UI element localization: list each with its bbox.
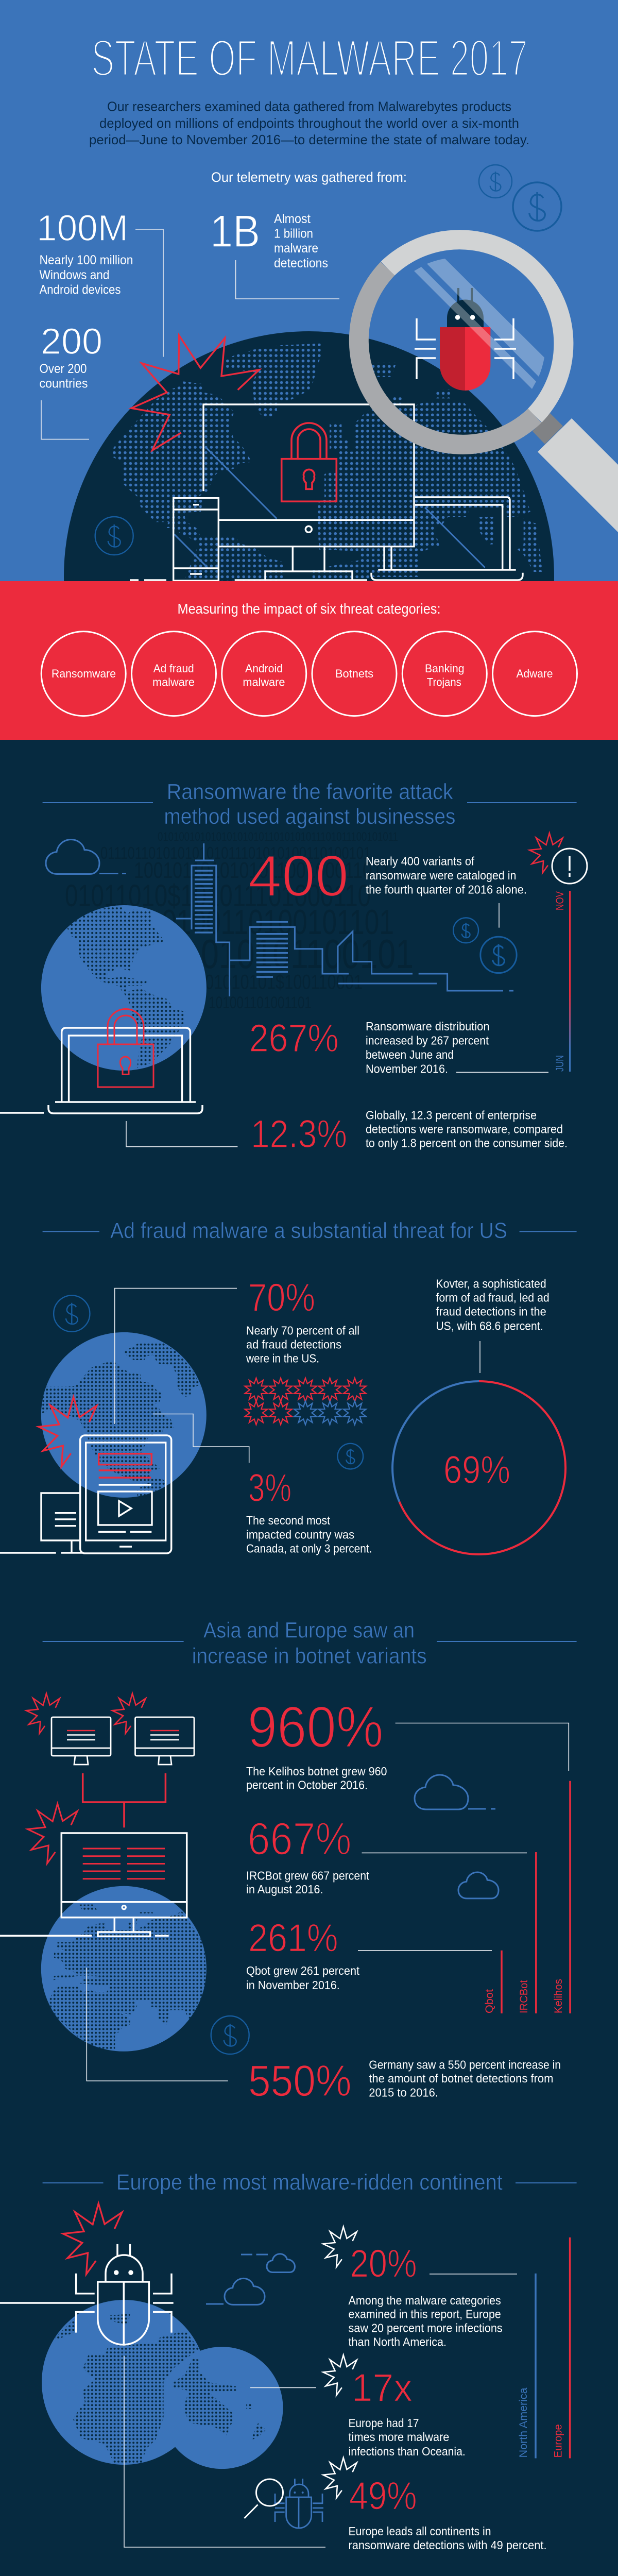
callout lines xyxy=(87,1723,569,2081)
text: Kovter description xyxy=(436,1277,550,1333)
category: adware: Adware xyxy=(516,667,553,680)
text: 667% description: in August 2016. xyxy=(246,1883,323,1896)
icon: phone xyxy=(174,498,218,581)
stat: 200 countries xyxy=(39,321,102,391)
text: 3% description xyxy=(246,1514,372,1555)
intro paragraph: Our researchers examined data gathered from Malwarebytes products xyxy=(107,99,511,114)
bar chart: botnet growth: Kelihos xyxy=(553,1979,564,2013)
icon: desktop monitor xyxy=(0,1493,82,1553)
icon: red burst xyxy=(131,335,259,450)
icon: dollar coin xyxy=(211,2016,249,2054)
globe: americas xyxy=(41,902,211,1077)
text: 667% description: IRCBot grew 667 percent xyxy=(246,1869,370,1883)
panel: threat categories xyxy=(0,581,618,740)
intro paragraph xyxy=(89,99,529,147)
stat: 20%: 20% xyxy=(350,2242,417,2286)
binary code background: 0101001010101010101011010101011101011100101011 xyxy=(158,830,398,844)
icon: magnifying glass xyxy=(359,240,618,532)
text: 12.3% description: detections were ransomware, compared xyxy=(366,1123,563,1136)
category: ad fraud malware: Ad fraud xyxy=(153,662,194,675)
heading: botnets: Asia and Europe saw an xyxy=(203,1618,415,1643)
timeline: June to November: NOV xyxy=(554,891,566,910)
stat: 1B detections xyxy=(210,206,328,270)
text: 20% description: examined in this report, Europe xyxy=(348,2307,501,2320)
magnifier glare xyxy=(414,259,544,389)
globes: dotted maps xyxy=(41,2298,286,2473)
icon: command monitor xyxy=(0,1804,187,1936)
panel: hero header xyxy=(0,0,618,581)
text: 20% description: Among the malware categories xyxy=(348,2294,501,2307)
text: 960% description: percent in October 2016. xyxy=(246,1778,368,1792)
icon: desktop monitor xyxy=(130,404,414,580)
icon: coin on globe xyxy=(95,517,133,555)
telemetry subheading: Our telemetry was gathered from: xyxy=(211,170,407,185)
binary code background: 01011010$101011101000110 xyxy=(65,878,371,913)
icon: tablet with ad xyxy=(80,1435,171,1553)
text: 70% description: were in the US. xyxy=(246,1352,319,1365)
text: 12.3% description xyxy=(366,1109,568,1150)
stat: 70%: 70% xyxy=(248,1276,315,1320)
heading: Europe: Europe the most malware-ridden continent xyxy=(116,2170,503,2195)
text: 261% description: Qbot grew 261 percent xyxy=(246,1964,360,1977)
callout lines xyxy=(124,2274,517,2547)
heading: ransomware: Ransomware the favorite attack xyxy=(167,779,453,804)
category: ransomware xyxy=(41,632,126,716)
icon: cityscape xyxy=(176,843,513,996)
category: adware xyxy=(492,632,577,716)
category: android malware: Android xyxy=(245,662,283,675)
icon: dollar coins top xyxy=(479,165,561,231)
stat: 200 countries: countries xyxy=(39,377,88,391)
text: 400 description: ransomware were cataloged in xyxy=(366,869,516,882)
text: 667% description xyxy=(246,1869,370,1896)
text: Kovter description: fraud detections in the xyxy=(436,1305,546,1318)
heading: ransomware: method used against businesses xyxy=(164,804,455,829)
text: Kovter description: Kovter, a sophisticated xyxy=(436,1277,546,1291)
stat: 100M devices: Nearly 100 million xyxy=(39,253,133,267)
binary code background: 100101101010101100100011011 xyxy=(134,858,390,883)
stat: 267%: 267% xyxy=(249,1016,339,1060)
text: Kovter description: US, with 68.6 percent. xyxy=(436,1319,543,1333)
text: 261% description: in November 2016. xyxy=(246,1978,340,1992)
icon: red bug xyxy=(415,288,516,391)
icon: infected monitors xyxy=(26,1693,194,1827)
intro paragraph: period—June to November 2016—to determine the state of malware today. xyxy=(89,132,529,147)
bar chart: botnet growth: IRCBot xyxy=(518,1980,530,2013)
stat: 100M devices: 100M xyxy=(37,208,128,249)
icon: dollar coins xyxy=(54,1295,363,1469)
category: ad fraud malware: malware xyxy=(152,676,195,689)
donut chart: 69%: 69% xyxy=(443,1448,510,1492)
text: 267% description xyxy=(366,1020,489,1075)
panel: botnet section xyxy=(0,1618,577,2106)
text: 12.3% description: to only 1.8 percent on the consumer side. xyxy=(366,1137,568,1150)
binary code background: 0100110100101101 xyxy=(162,903,394,942)
binary code background xyxy=(65,830,414,1012)
text: Kovter description: form of ad fraud, led ad xyxy=(436,1291,550,1304)
text: 20% description: saw 20 percent more infections xyxy=(348,2321,503,2335)
globe: dotted map xyxy=(41,1329,211,1504)
timeline: June to November xyxy=(554,891,571,1072)
globe: dotted map xyxy=(41,1886,211,2061)
icon: red burst xyxy=(63,2204,122,2274)
text: 550% description xyxy=(369,2058,561,2099)
text: 550% description: Germany saw a 550 percent increase in xyxy=(369,2058,561,2071)
text: 550% description: the amount of botnet detections from xyxy=(369,2072,553,2085)
text: 70% description: Nearly 70 percent of all xyxy=(246,1324,359,1337)
text: 20% description: than North America. xyxy=(348,2335,447,2349)
timeline: June to November: JUN xyxy=(554,1055,566,1072)
icon: red padlock xyxy=(282,423,336,501)
text: 49% description: Europe leads all continents in xyxy=(348,2524,491,2538)
bar chart: botnet growth: Qbot xyxy=(484,1989,495,2013)
icon: white outlined bug xyxy=(0,2244,174,2345)
stat: 200 countries: 200 xyxy=(41,321,102,362)
icon: cloud xyxy=(46,840,126,874)
text: 267% description: increased by 267 percent xyxy=(366,1033,489,1047)
category: botnets xyxy=(312,632,397,716)
heading: ad fraud: Ad fraud malware a substantial threat for US xyxy=(110,1218,507,1243)
icon: laptop xyxy=(371,497,523,580)
panel: Europe section xyxy=(0,2170,577,2552)
categories heading: Measuring the impact of six threat categories: xyxy=(177,601,441,617)
text: 267% description: Ransomware distribution xyxy=(366,1020,489,1033)
text: 49% description: ransomware detections with 49 percent. xyxy=(348,2538,547,2552)
text: 960% description: The Kelihos botnet grew 960 xyxy=(246,1765,387,1778)
category: android malware: malware xyxy=(243,676,285,689)
text: 17x description: Europe had 17 xyxy=(348,2416,419,2430)
stat: 1B detections: Almost xyxy=(274,212,311,226)
stat: 1B detections: 1 billion xyxy=(274,226,313,241)
text: 261% description xyxy=(246,1964,360,1992)
icon: clouds xyxy=(206,2254,295,2304)
text: 3% description: impacted country was xyxy=(246,1528,354,1541)
text: 49% description xyxy=(348,2524,547,2552)
text: 960% description xyxy=(246,1765,387,1792)
heading: botnets: increase in botnet variants xyxy=(192,1643,427,1668)
text: 12.3% description: Globally, 12.3 percent of enterprise xyxy=(366,1109,537,1122)
binary code background: 01010101$100110001 xyxy=(205,971,363,993)
stat: 1B detections: 1B xyxy=(210,206,260,257)
text: 17x description xyxy=(348,2416,466,2458)
text: 3% description: Canada, at only 3 percent. xyxy=(246,1541,372,1555)
text: 400 description: the fourth quarter of 2016 alone. xyxy=(366,883,527,896)
stat: 200 countries: Over 200 xyxy=(39,362,87,376)
stat: 1B detections: malware xyxy=(274,241,318,256)
stat: 1B detections: detections xyxy=(274,256,328,270)
icon: red burst xyxy=(39,1397,97,1467)
icon: laptop with padlock xyxy=(0,1009,202,1113)
text: 3% description: The second most xyxy=(246,1514,331,1527)
text: 400 description xyxy=(366,854,527,896)
screen glare lines xyxy=(174,448,485,568)
binary code background: 01110110101010101011101010100110100101 xyxy=(100,843,371,862)
bar chart: Europe vs North America: North America xyxy=(518,2387,529,2458)
panel: ransomware section xyxy=(0,779,587,1156)
callout lines xyxy=(115,1289,480,1463)
binary code background: 101001101001101 xyxy=(209,993,312,1012)
stat: 49%: 49% xyxy=(349,2475,417,2518)
star pictogram: 7 of 10 xyxy=(245,1378,366,1425)
category: android malware xyxy=(222,632,306,716)
text: 70% description: ad fraud detections xyxy=(246,1337,341,1351)
bar chart: Europe vs North America: Europe xyxy=(552,2424,564,2458)
category: ad fraud malware xyxy=(132,632,216,716)
stat: 400: 400 xyxy=(248,843,349,908)
category: banking trojans: Trojans xyxy=(427,676,461,689)
heading: botnets xyxy=(43,1618,577,1668)
callout lines xyxy=(126,903,548,1147)
icon: dollar coins xyxy=(453,918,517,973)
callout lines xyxy=(41,229,339,439)
text: 400 description: Nearly 400 variants of xyxy=(366,854,475,868)
stat: 960%: 960% xyxy=(248,1694,384,1759)
category: ransomware: Ransomware xyxy=(52,667,116,680)
binary code background: 010101100101 xyxy=(201,931,414,977)
text: 17x description: infections than Oceania. xyxy=(348,2445,466,2458)
text: 267% description: between June and xyxy=(366,1048,454,1061)
icon: magnifier with blue bug xyxy=(244,2479,323,2528)
category: banking trojans xyxy=(402,632,487,716)
stat: 12.3%: 12.3% xyxy=(251,1112,347,1156)
panel: ad fraud section xyxy=(0,1218,577,1555)
stat: 3%: 3% xyxy=(248,1466,291,1510)
bar chart: Europe vs North America xyxy=(518,2238,570,2459)
icon: alert circle with burst xyxy=(529,833,587,884)
text: 20% description xyxy=(348,2294,503,2349)
text: 267% description: November 2016. xyxy=(366,1062,448,1075)
donut chart: 69% xyxy=(392,1381,565,1554)
stat: 100M devices: Android devices xyxy=(39,282,121,297)
bar chart: botnet growth xyxy=(484,1781,570,2013)
category: botnets: Botnets xyxy=(335,667,373,680)
text: 70% description xyxy=(246,1324,359,1365)
icon: clouds xyxy=(415,1775,499,1899)
stat: 100M devices xyxy=(37,208,133,297)
stat: 17x: 17x xyxy=(352,2366,413,2410)
stat: 667%: 667% xyxy=(248,1813,352,1865)
icon: white bursts xyxy=(323,2227,357,2498)
globe with dotted map xyxy=(62,330,556,581)
stat: 100M devices: Windows and xyxy=(39,268,109,282)
text: 17x description: times more malware xyxy=(348,2430,449,2444)
text: 550% description: 2015 to 2016. xyxy=(369,2086,438,2099)
stat: 261%: 261% xyxy=(248,1917,338,1960)
category: banking trojans: Banking xyxy=(425,662,465,675)
intro paragraph: deployed on millions of endpoints throughout the world over a six-month xyxy=(99,115,519,131)
heading: ransomware xyxy=(43,779,577,829)
stat: 550%: 550% xyxy=(248,2057,352,2106)
